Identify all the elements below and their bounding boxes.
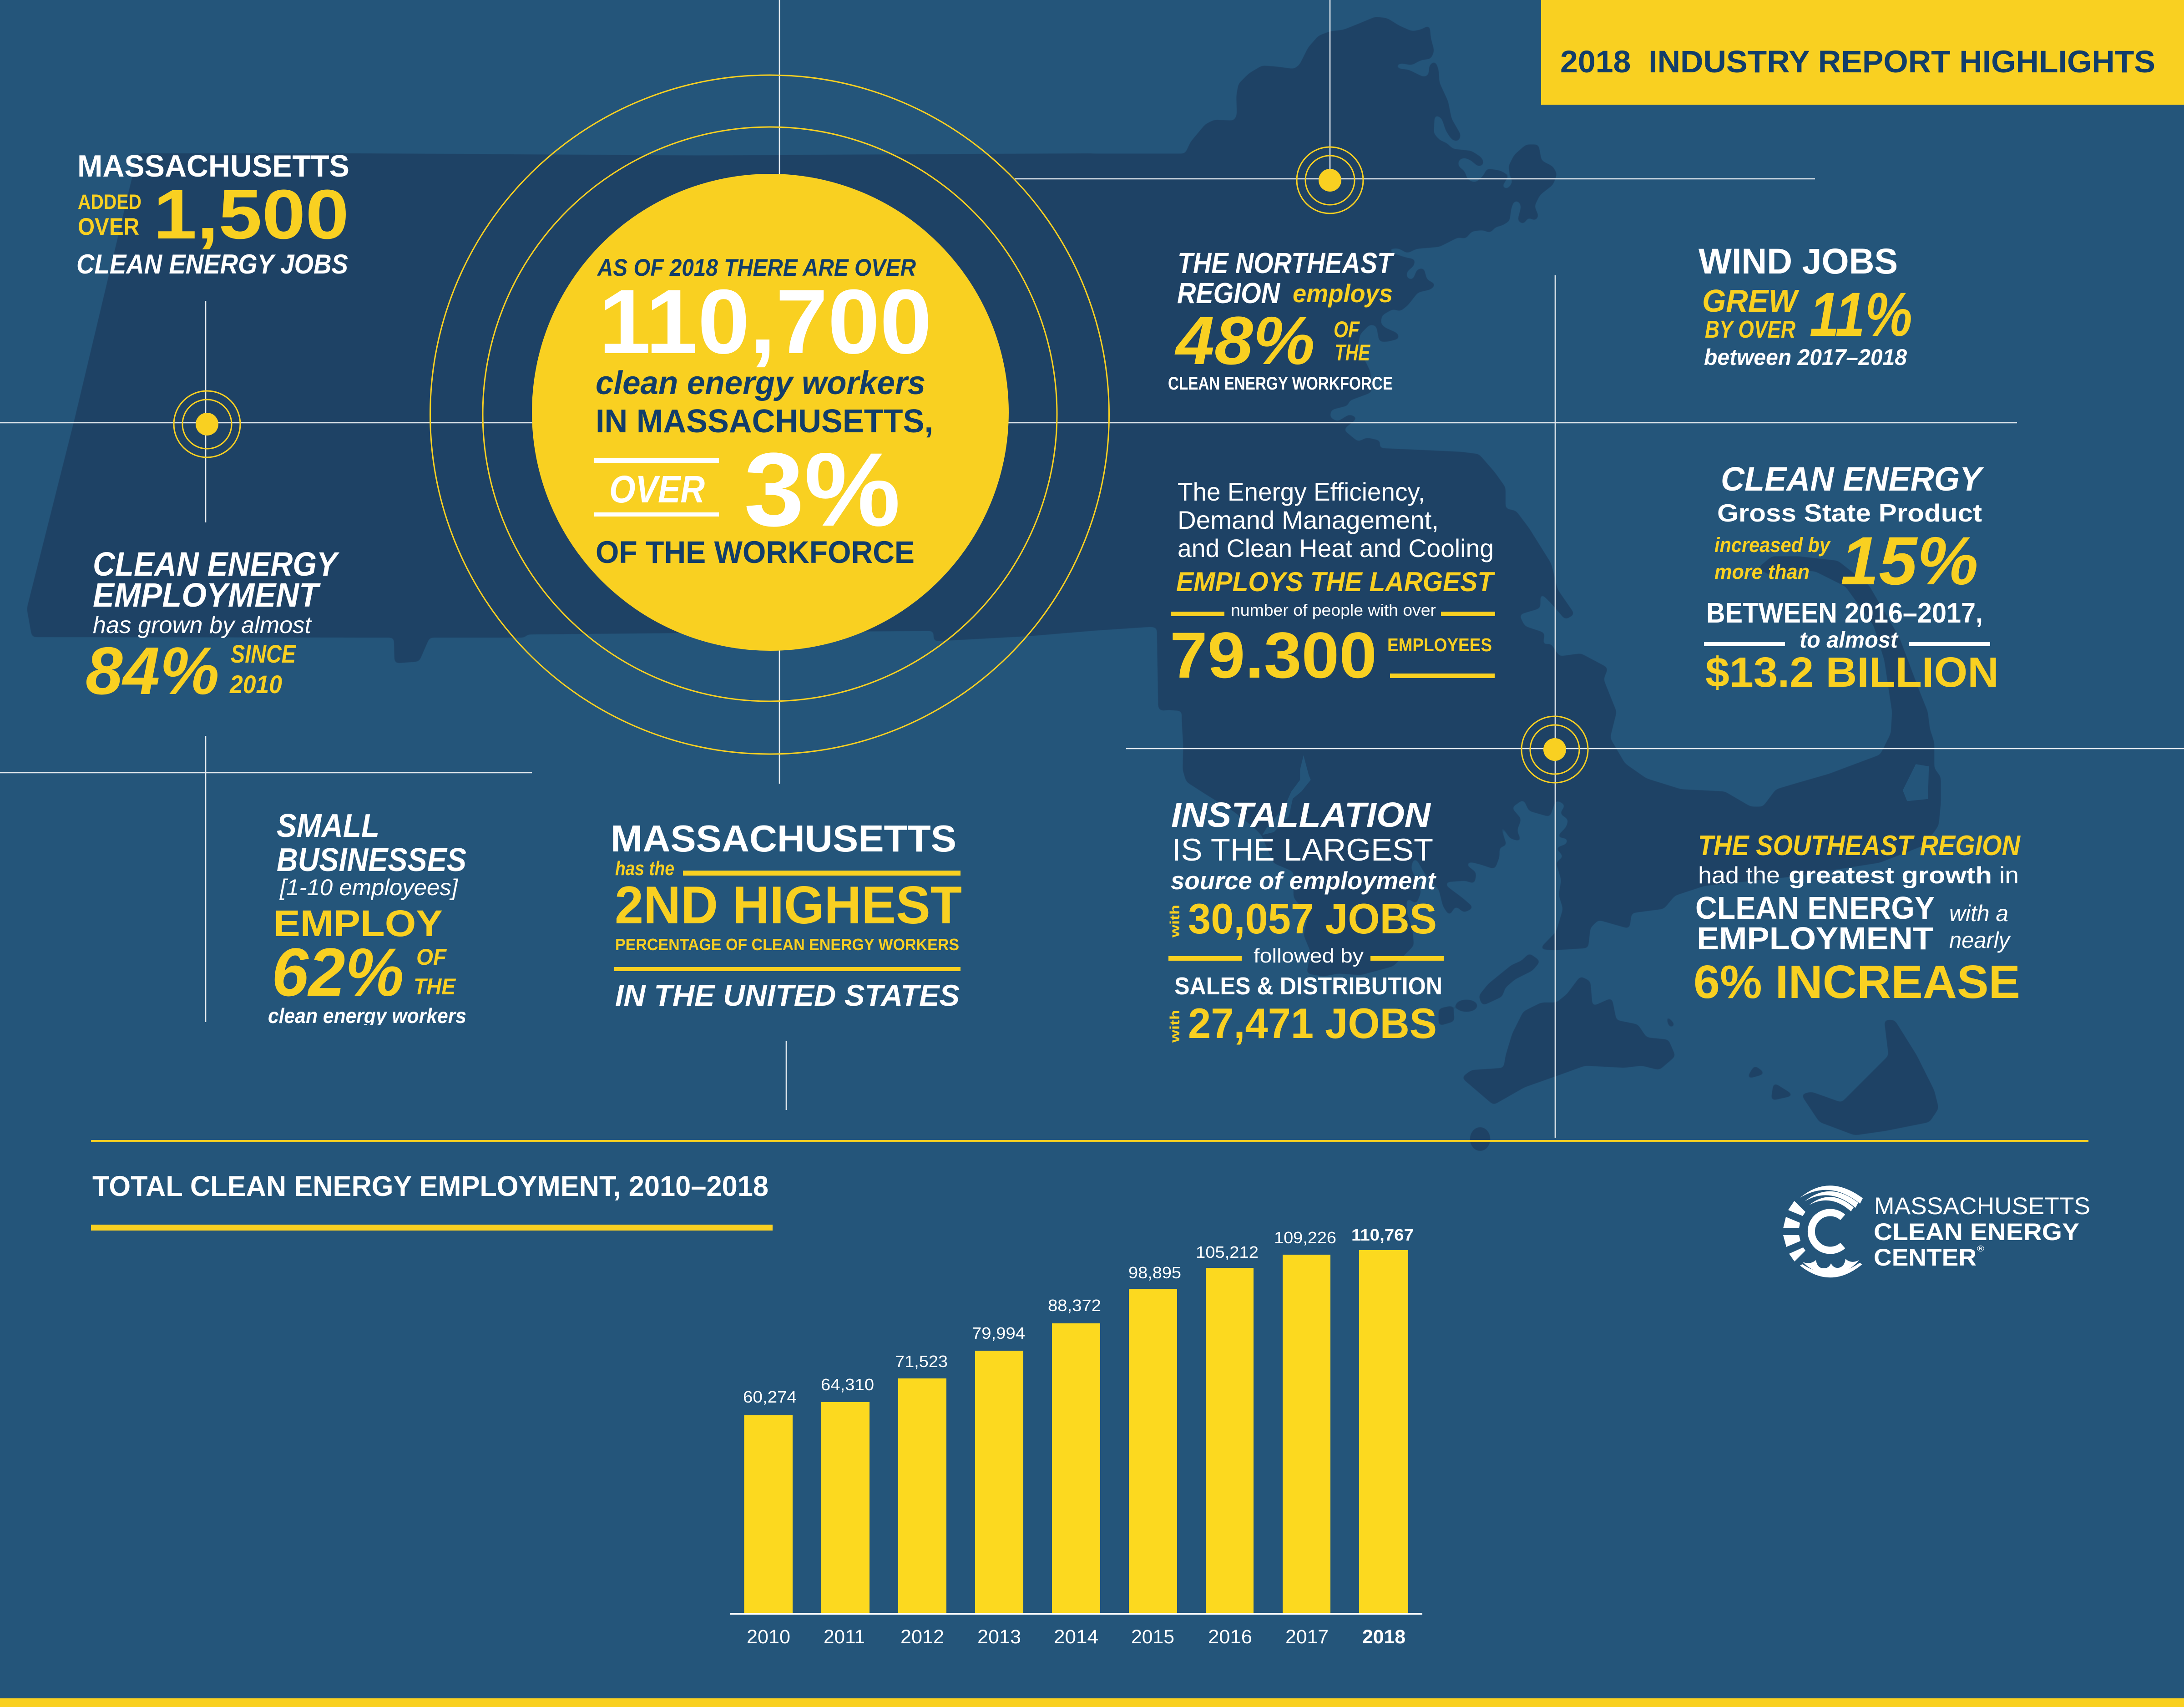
callout: 2nd highest: [611, 817, 962, 1012]
section divider: [91, 1140, 2088, 1142]
callout: installation jobs: SALES & DISTRIBUTION: [1174, 973, 1442, 1000]
logo: Massachusetts Clean Energy Center: [1783, 1185, 2090, 1277]
callout: southeast region: nearly: [1949, 927, 2011, 953]
callout: gross state product: $13.2 BILLION: [1705, 648, 1999, 696]
year labels: 2010: [747, 1626, 790, 1648]
callout: southeast region: with a: [1949, 901, 2008, 926]
callout: wind jobs: between 2017–2018: [1704, 344, 1907, 370]
top-right banner: 2018 INDUSTRY REPORT HIGHLIGHTS: [1560, 44, 2155, 79]
value labels: 110,767: [1351, 1226, 1414, 1244]
chart heading: TOTAL CLEAN ENERGY EMPLOYMENT, 2010–2018: [92, 1170, 768, 1202]
callout: southeast region: had the: [1698, 862, 1780, 889]
callout: energy efficiency: number of people with over: [1231, 601, 1436, 619]
callout: added 1,500 jobs: OVER: [78, 213, 139, 240]
callout: gross state product: to almost: [1800, 627, 1899, 653]
callout: 110,700 workers: 110,700: [599, 270, 932, 373]
bar chart: total clean energy employment: [730, 1226, 1422, 1648]
value labels: 60,274: [743, 1388, 797, 1406]
callout: 2nd highest: MASSACHUSETTS: [611, 817, 956, 860]
callout: northeast region: CLEAN ENERGY WORKFORCE: [1168, 374, 1393, 394]
callout: wind jobs: GREW: [1702, 283, 1800, 319]
callout: 2nd highest: IN THE UNITED STATES: [615, 978, 960, 1012]
value labels: 79,994: [972, 1324, 1025, 1342]
callout: 110,700 workers: IN MASSACHUSETTS,: [596, 403, 933, 440]
callout: energy efficiency: Demand Management,: [1178, 506, 1439, 534]
callout: energy efficiency: [1170, 477, 1495, 692]
callout: small businesses: SMALL: [277, 808, 379, 844]
bars: [744, 1250, 1408, 1613]
callout: installation jobs: [1168, 795, 1444, 1047]
value labels: 105,212: [1196, 1243, 1259, 1261]
year labels: 2016: [1208, 1626, 1252, 1648]
callout: added 1,500 jobs: MASSACHUSETTS: [77, 149, 349, 183]
callout: gross state product: [1704, 460, 1999, 696]
callout: installation jobs: 30,057 JOBS: [1188, 895, 1437, 942]
callout: employment grown 84%: SINCE: [231, 639, 296, 668]
callout: added 1,500 jobs: 1,500: [153, 175, 349, 253]
year labels: 2015: [1131, 1626, 1174, 1648]
grid lines: [0, 0, 2184, 1138]
callout: southeast region: THE SOUTHEAST REGION: [1698, 830, 2021, 861]
axis: [730, 1613, 1422, 1615]
callout: small businesses: [1-10 employees]: [279, 875, 458, 900]
callout: installation jobs: with: [1168, 1010, 1183, 1043]
year labels: 2017: [1285, 1626, 1329, 1648]
central target circles: [430, 75, 1109, 754]
callout: installation jobs: INSTALLATION: [1171, 795, 1431, 835]
target marker: northeast: [1297, 147, 1363, 213]
value labels: 71,523: [895, 1352, 948, 1371]
callout: northeast region: [1168, 247, 1395, 394]
top-right banner: [1541, 0, 2184, 105]
bottom band: [0, 1698, 2184, 1707]
year labels: [747, 1626, 1405, 1648]
callout: southeast region: EMPLOYMENT: [1697, 921, 1933, 956]
callout: southeast region: 6% INCREASE: [1694, 956, 2020, 1008]
callout: 2nd highest: 2ND HIGHEST: [615, 875, 962, 935]
callout: small businesses: 62%: [272, 934, 404, 1010]
callout: installation jobs: with: [1168, 905, 1183, 938]
value labels: 98,895: [1128, 1263, 1181, 1282]
callout: northeast region: REGION: [1177, 277, 1281, 309]
callout: small businesses: clean energy workers: [268, 1004, 466, 1028]
icon: logo mark: [1783, 1185, 1863, 1277]
year labels: 2011: [824, 1626, 865, 1648]
callout: gross state product: CLEAN ENERGY: [1721, 460, 1984, 498]
callout: northeast region: 48%: [1174, 302, 1315, 379]
callout: employment grown 84%: 2010: [229, 670, 282, 699]
callout: added 1,500 jobs: [76, 149, 349, 279]
value labels: 64,310: [821, 1375, 874, 1394]
target marker: southeast: [1522, 716, 1588, 783]
callout: 110,700 workers: AS OF 2018 THERE ARE OVER: [597, 254, 916, 281]
value labels: [743, 1226, 1414, 1406]
callout: southeast region: in: [1999, 862, 2019, 889]
year labels: 2013: [977, 1626, 1021, 1648]
callout: employment grown 84%: 84%: [86, 633, 219, 709]
callout: northeast region: OF: [1334, 317, 1360, 342]
callout: northeast region: THE NORTHEAST: [1178, 247, 1395, 279]
callout: southeast region: greatest growth: [1789, 862, 1992, 889]
callout: installation jobs: IS THE LARGEST: [1172, 832, 1433, 867]
logo: Massachusetts Clean Energy Center: ®: [1977, 1244, 1984, 1253]
callout: small businesses: OF: [416, 944, 447, 970]
callout: southeast region: CLEAN ENERGY: [1695, 890, 1935, 926]
map water details: [1262, 755, 1929, 835]
logo: Massachusetts Clean Energy Center: CENTER: [1874, 1244, 1977, 1271]
callout: added 1,500 jobs: ADDED: [78, 190, 142, 213]
year labels: 2012: [900, 1626, 944, 1648]
logo: Massachusetts Clean Energy Center: MASSACHUSETTS: [1874, 1193, 2090, 1220]
callout: 110,700 workers: OF THE WORKFORCE: [596, 535, 915, 570]
callout: 110,700 workers: OVER: [609, 468, 705, 511]
callout: employment grown 84%: has grown by almost: [93, 612, 313, 638]
callout: added 1,500 jobs: CLEAN ENERGY JOBS: [76, 249, 348, 279]
callout: wind jobs: BY OVER: [1705, 316, 1795, 343]
logo: Massachusetts Clean Energy Center: CLEAN ENERGY: [1874, 1219, 2079, 1246]
callout: energy efficiency: The Energy Efficiency,: [1178, 477, 1425, 506]
callout: 110,700 workers: 3%: [744, 431, 900, 548]
callout: employment grown 84%: CLEAN ENERGY: [93, 545, 339, 583]
year labels: 2014: [1054, 1626, 1098, 1648]
callout: gross state product: 15%: [1840, 522, 1978, 599]
callout: 2nd highest: PERCENTAGE OF CLEAN ENERGY WORKERS: [615, 935, 959, 954]
callout: small businesses: BUSINESSES: [277, 842, 466, 878]
callout: installation jobs: 27,471 JOBS: [1188, 999, 1437, 1047]
year labels: 2018: [1362, 1626, 1405, 1648]
callout: small businesses: EMPLOY: [273, 903, 443, 944]
callout: wind jobs: 11%: [1810, 280, 1912, 350]
callout: southeast region: [1694, 830, 2021, 1008]
callout: 110,700 workers: clean energy workers: [596, 365, 925, 401]
map of Massachusetts: [29, 17, 1940, 1150]
callout: small businesses: [268, 808, 466, 1028]
callout: small businesses: THE: [414, 974, 456, 999]
callout: 110,700 workers: [594, 254, 933, 570]
callout: gross state product: Gross State Product: [1717, 499, 1982, 527]
callout: energy efficiency: 79.300: [1170, 619, 1377, 692]
callout: energy efficiency: and Clean Heat and Cooling: [1178, 534, 1494, 562]
callout: gross state product: BETWEEN 2016–2017,: [1706, 598, 1983, 629]
value labels: 88,372: [1048, 1296, 1101, 1315]
callout: northeast region: employs: [1293, 279, 1393, 308]
callout: wind jobs: [1699, 241, 1912, 370]
chart heading: [91, 1170, 773, 1231]
target marker: west: [174, 391, 240, 457]
callout: employment grown 84%: [86, 545, 339, 709]
callout: northeast region: THE: [1335, 340, 1370, 365]
callout: energy efficiency: EMPLOYEES: [1387, 634, 1492, 655]
value labels: 109,226: [1274, 1228, 1336, 1247]
callout: energy efficiency: EMPLOYS THE LARGEST: [1176, 567, 1495, 597]
callout: installation jobs: followed by: [1254, 945, 1364, 967]
callout: 2nd highest: has the: [615, 857, 674, 880]
callout: wind jobs: WIND JOBS: [1699, 241, 1898, 281]
callout: gross state product: more than: [1714, 560, 1810, 583]
callout: gross state product: increased by: [1714, 533, 1831, 557]
callout: employment grown 84%: EMPLOYMENT: [93, 576, 321, 614]
callout: installation jobs: source of employment: [1171, 866, 1437, 895]
